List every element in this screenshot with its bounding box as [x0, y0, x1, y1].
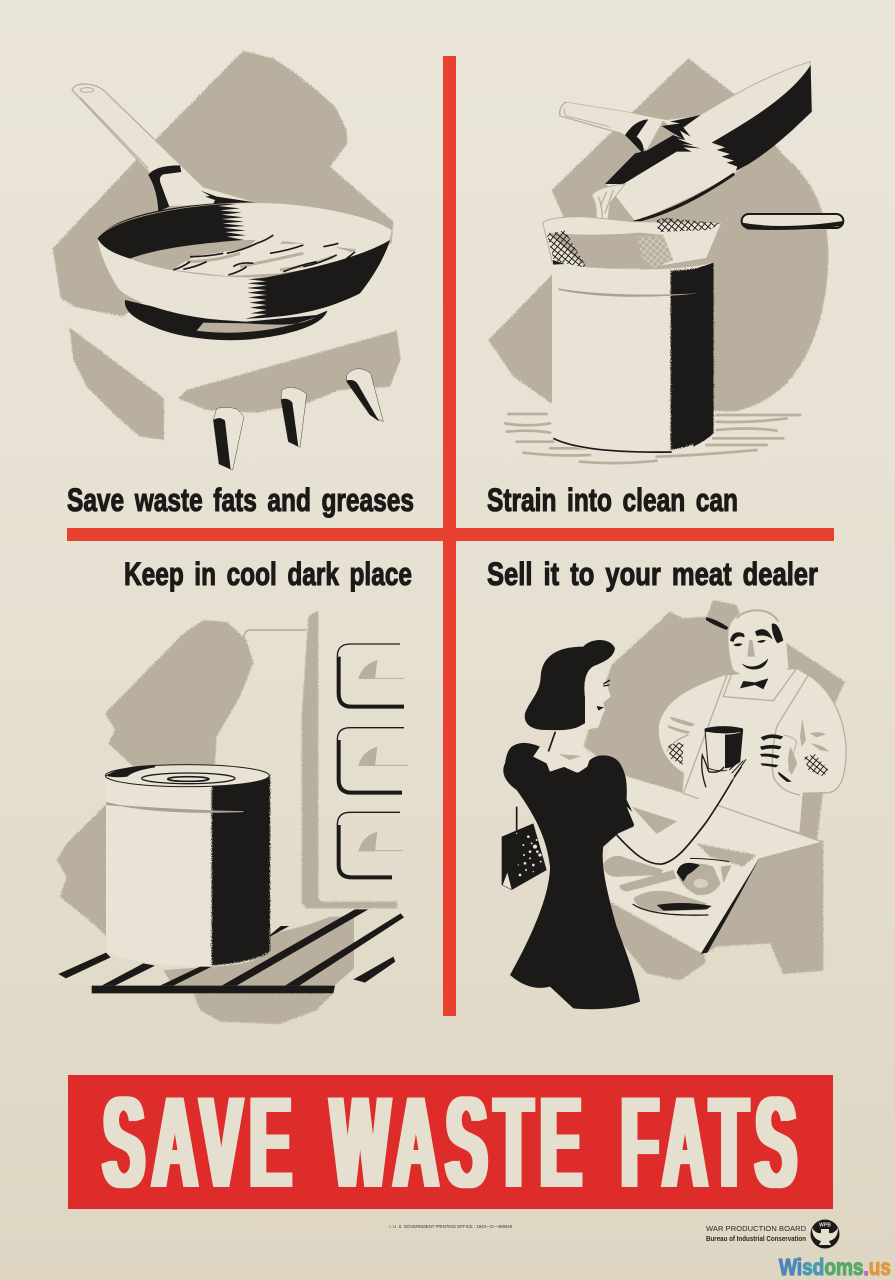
- panel: keep in cool dark place: [57, 611, 408, 1024]
- refrigerator door handles: [337, 644, 408, 877]
- arm and hand: [617, 755, 746, 864]
- caption: keep in cool dark place: Keep in cool dark place: [124, 556, 412, 592]
- wall shadow strip: [302, 611, 397, 908]
- floor shadow: [163, 917, 354, 987]
- banner: save waste fats: [68, 1069, 833, 1215]
- hair: [525, 640, 615, 730]
- war production board credit: Bureau of Industrial Conservation: [706, 1236, 806, 1243]
- caption: save waste fats and greases: Save waste fats and greases: [67, 482, 414, 518]
- caption: strain into clean can: Strain into clean can: [487, 482, 738, 518]
- burner ring: [125, 300, 327, 340]
- floor stripes: [58, 909, 404, 993]
- pan shadow shape: [53, 51, 393, 317]
- collar: [533, 747, 590, 773]
- watermark: wisdoms.us: Wisdoms.us: [779, 1254, 891, 1280]
- war production board credit: WAR PRODUCTION BOARD: [706, 1224, 807, 1233]
- butcher: [658, 609, 846, 833]
- pan outer shadow: [245, 240, 390, 319]
- war production board credit: [706, 1224, 807, 1243]
- pan handle: [72, 84, 260, 212]
- banner: save waste fats: SAVE: [103, 1069, 299, 1215]
- shadow shapes: [57, 620, 333, 1024]
- banner: save waste fats: WASTE: [331, 1069, 589, 1215]
- icon: WPB eagle badge: WPB: [819, 1222, 831, 1228]
- tilted frying pan: [565, 62, 812, 223]
- face and neck: [548, 665, 611, 758]
- handbag: [502, 807, 547, 890]
- clean can: [552, 260, 713, 453]
- shadow shape: [488, 58, 828, 412]
- pan interior shadow: [97, 203, 246, 259]
- red cross divider: [67, 56, 834, 1016]
- icon: WPB eagle badge: [810, 1220, 840, 1248]
- panel: strain into clean can: [488, 58, 843, 463]
- stored can: [105, 765, 270, 967]
- shadow shapes: [583, 600, 845, 981]
- counter and meats: [600, 777, 822, 955]
- woman: [502, 640, 746, 1009]
- puddle lines: [505, 414, 800, 463]
- pan handle: [560, 102, 700, 137]
- caption: sell it to your meat dealer: Sell it to your meat dealer: [487, 556, 818, 592]
- strainer: [543, 214, 843, 270]
- held can: [705, 726, 743, 771]
- stove knobs: [213, 369, 383, 470]
- stove shadow shapes: [69, 327, 401, 440]
- pan body: [97, 203, 392, 321]
- pan oil and bacon: [130, 225, 357, 278]
- dress: [503, 743, 640, 1009]
- pouring grease: [592, 184, 632, 231]
- printer credit: ☆ U. S. GOVERNMENT PRINTING OFFICE : 1943—O—469848: [388, 1224, 512, 1229]
- panel: sell it to your meat dealer: [502, 600, 846, 1009]
- panel: save waste fats and greases, frying pan on stove: [53, 51, 401, 470]
